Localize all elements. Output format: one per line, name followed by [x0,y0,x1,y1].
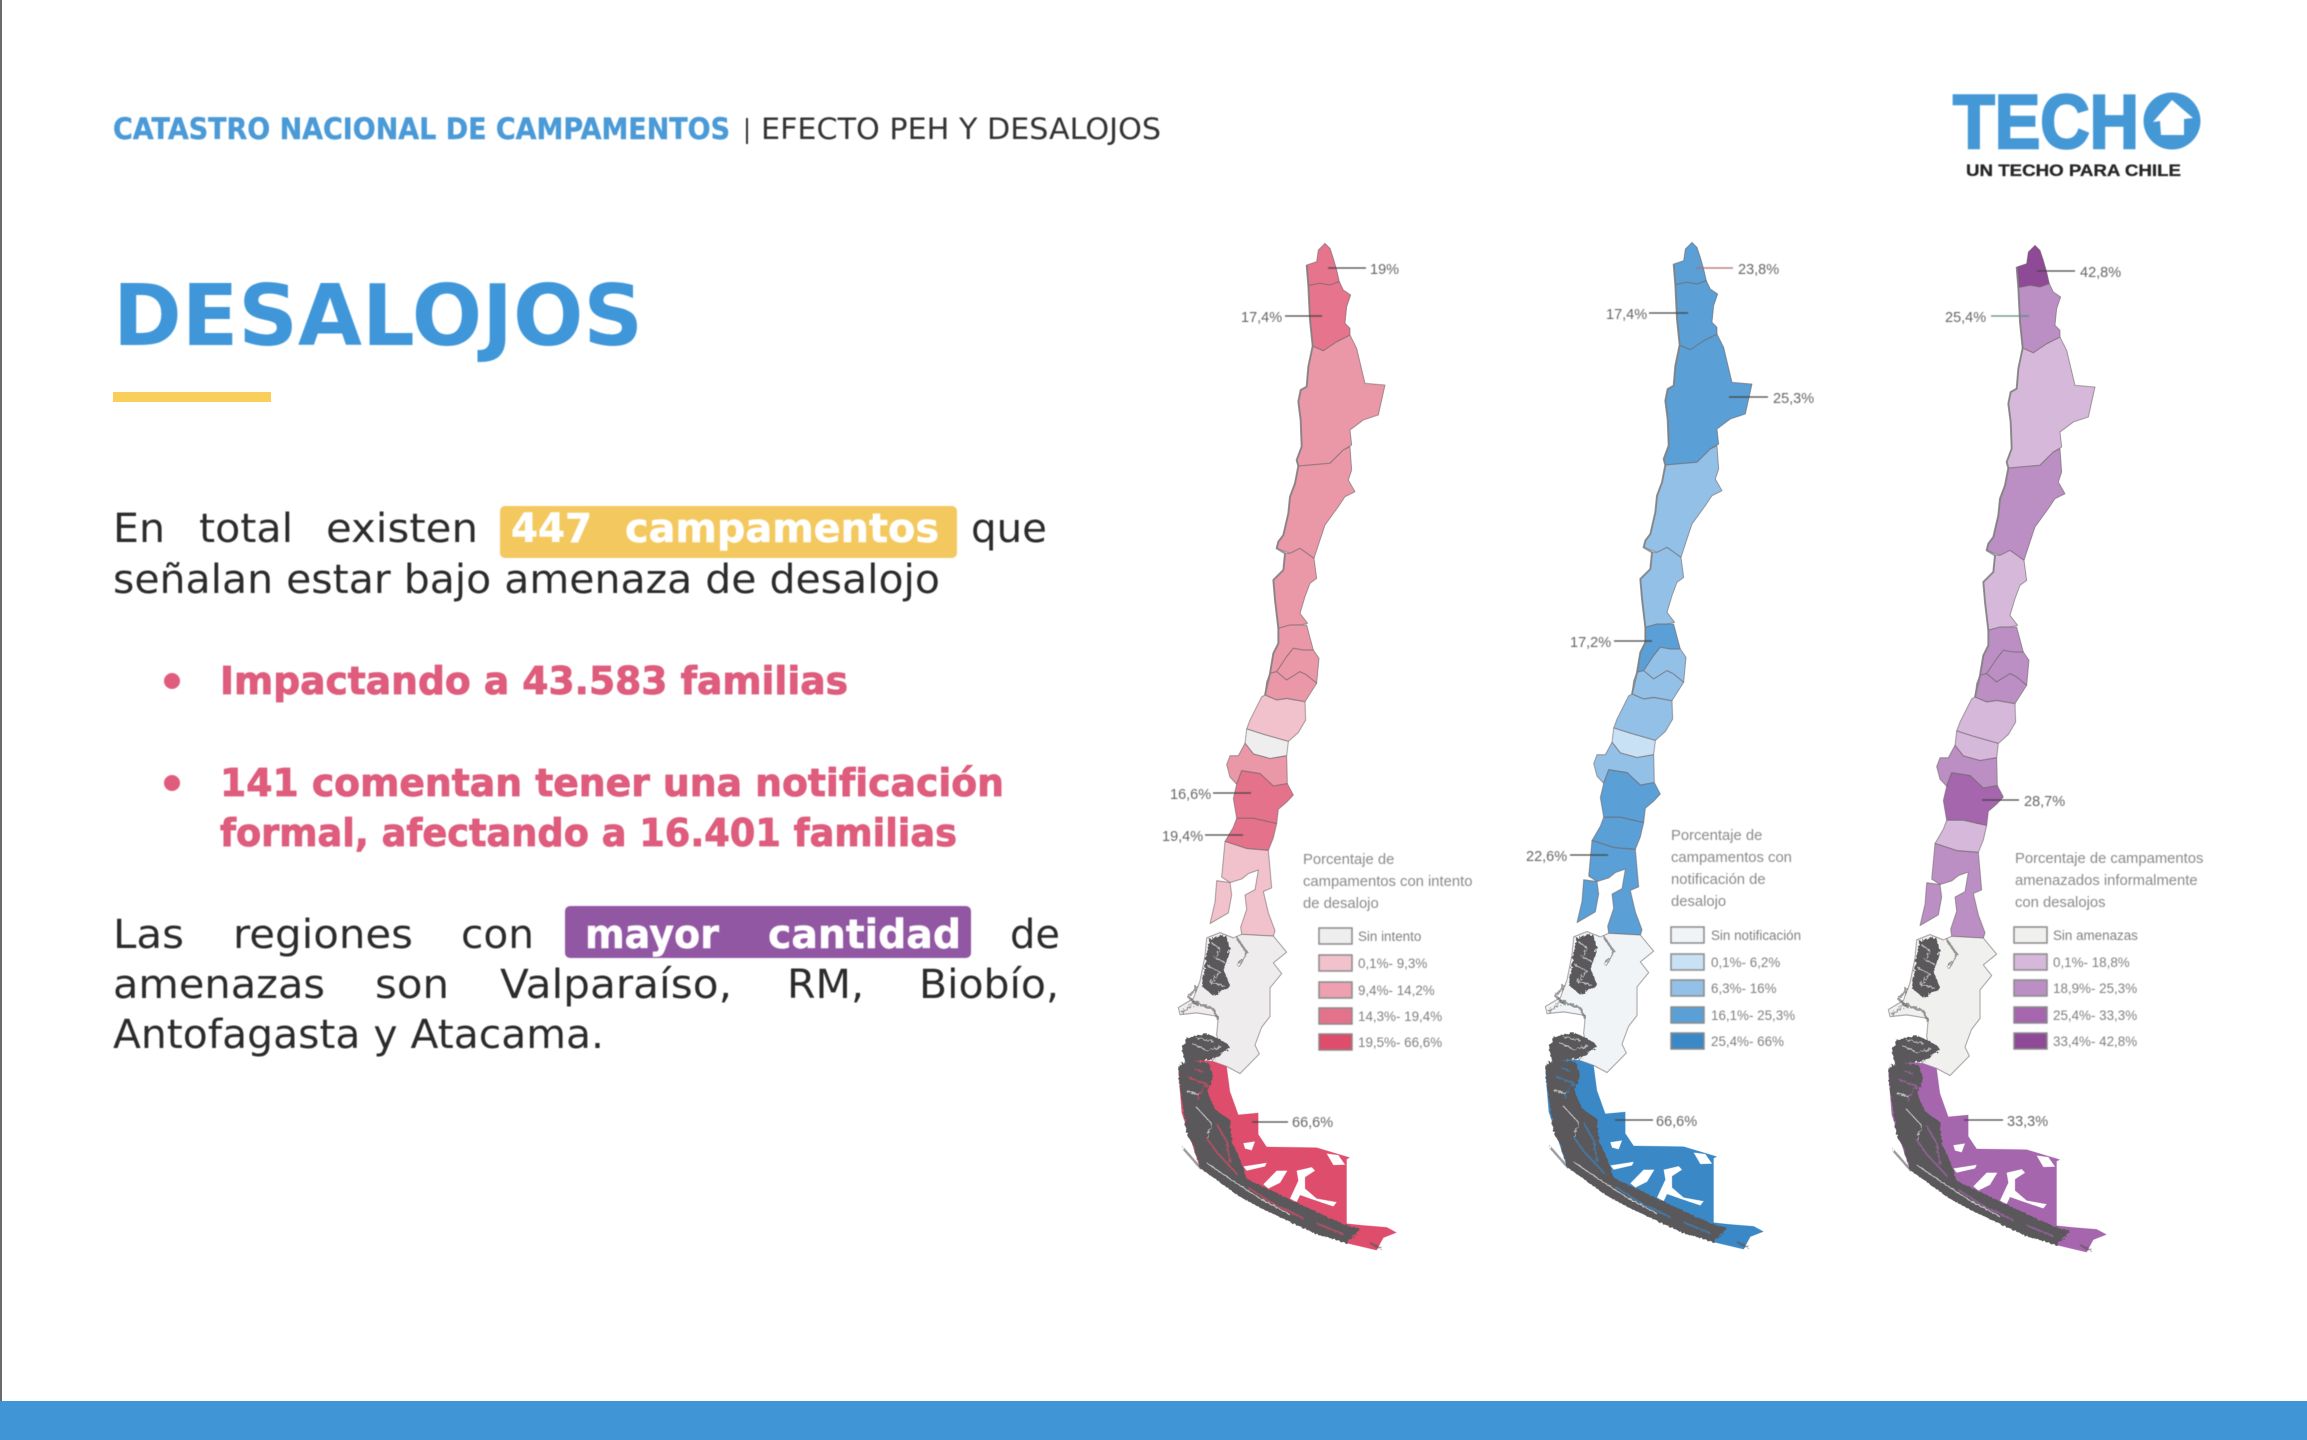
legend: pink map: Sin intento [1358,929,1421,944]
callouts: purple map: 33,3% [2007,1114,2048,1130]
legend: purple map: Porcentaje de campamentos [2015,851,2203,867]
callouts: blue map: 25,3% [1773,391,1814,407]
left edge line [0,0,2,1440]
text block: total campamentos: En [113,506,165,552]
bullet: notificación formal: formal, afectando a 16.401 familias [220,811,957,855]
text block: regiones con mayor cantidad: de [1010,912,1060,958]
map panel: intento de desalojo (pink) [1162,243,1472,1250]
text block: regiones con mayor cantidad: Antofagasta y Atacama. [113,1012,604,1058]
callouts: pink map: 19,4% [1162,829,1203,845]
text block: regiones con mayor cantidad: RM, [787,962,864,1008]
highlight: 447 campamentos [500,506,957,558]
header: section title: EFECTO PEH Y DESALOJOS [761,112,1161,146]
callouts: purple map: 42,8% [2080,265,2121,281]
highlight: 447 campamentos: 447 [511,506,592,552]
text block: regiones con mayor cantidad: amenazas [113,962,325,1008]
callouts: blue map: 23,8% [1738,262,1779,278]
text block: regiones con mayor cantidad: regiones [233,912,413,958]
legend: pink map: de desalojo [1303,896,1379,912]
legend: purple map: amenazados informalmente [2015,873,2198,889]
legend: blue map: campamentos con [1671,850,1792,866]
logo: TECHO: UN TECHO PARA CHILE [1966,161,2181,180]
text block: regiones con mayor cantidad: Biobío, [919,962,1059,1008]
callouts: blue map: 66,6% [1656,1114,1697,1130]
legend: pink map: campamentos con intento [1303,874,1472,890]
callouts: blue map: 17,2% [1570,635,1611,651]
bullet: notificación formal [164,761,1004,855]
legend: pink map [1303,852,1472,1050]
highlight: mayor cantidad [565,906,971,958]
legend: purple map: con desalojos [2015,895,2106,911]
legend: blue map: 0,1%- 6,2% [1711,955,1780,970]
legend: purple map: 0,1%- 18,8% [2053,955,2130,970]
text block: total campamentos: señalan estar bajo amenaza de desalojo [113,557,940,603]
highlight: 447 campamentos: campamentos [625,506,939,552]
legend: purple map: 33,4%- 42,8% [2053,1034,2137,1049]
legend: blue map [1671,828,1801,1049]
map panel: notificación de desalojo (blue) [1526,242,1814,1249]
callouts: purple map: 25,4% [1945,310,1986,326]
callouts: purple map: 28,7% [2024,794,2065,810]
legend: blue map: desalojo [1671,894,1726,910]
legend: blue map: Sin notificación [1711,928,1801,943]
footer band [0,1401,2307,1440]
text block: regiones con mayor cantidad: Las [113,912,184,958]
legend: blue map: 25,4%- 66% [1711,1034,1784,1049]
text block: regiones con mayor cantidad [113,906,1060,1058]
callouts: pink map: 19% [1370,262,1399,278]
legend: pink map: 19,5%- 66,6% [1358,1035,1442,1050]
text block: total campamentos [113,506,1047,603]
bullet: familias impactadas: Impactando a 43.583 familias [220,659,848,703]
bullet: notificación formal: 141 comentan tener una notificación [220,761,1004,805]
callouts: pink map [1162,262,1399,1131]
title accent bar [113,392,271,402]
legend: pink map: 0,1%- 9,3% [1358,956,1427,971]
text block: total campamentos: que [971,506,1047,552]
map panel: amenazas informales (purple) [1888,245,2203,1252]
logo: TECHO: TECH [1953,80,2139,165]
legend: purple map: 18,9%- 25,3% [2053,981,2137,996]
text block: regiones con mayor cantidad: con [461,912,534,958]
callouts: blue map: 17,4% [1606,307,1647,323]
callouts: blue map [1526,262,1814,1130]
text block: total campamentos: existen [326,506,478,552]
text block: total campamentos: total [199,506,293,552]
callouts: pink map: 66,6% [1292,1115,1333,1131]
highlight: mayor cantidad: mayor [585,912,719,958]
legend: pink map: 14,3%- 19,4% [1358,1009,1442,1024]
callouts: pink map: 16,6% [1170,787,1211,803]
legend: purple map: Sin amenazas [2053,928,2138,943]
callouts: blue map: 22,6% [1526,849,1567,865]
highlight: mayor cantidad: cantidad [768,912,961,958]
legend: purple map: 25,4%- 33,3% [2053,1008,2137,1023]
text block: regiones con mayor cantidad: son [375,962,449,1008]
map: Chile pink [1178,243,1397,1250]
legend: blue map: Porcentaje de [1671,828,1762,844]
legend: blue map: 6,3%- 16% [1711,981,1777,996]
legend: pink map: Porcentaje de [1303,852,1394,868]
map: Chile purple [1888,245,2107,1252]
header: section title [113,112,1161,146]
legend: blue map: 16,1%- 25,3% [1711,1008,1795,1023]
legend: purple map [2014,851,2203,1049]
legend: pink map: 9,4%- 14,2% [1358,983,1435,998]
text block: regiones con mayor cantidad: Valparaíso, [500,962,732,1008]
callouts: purple map [1945,265,2121,1130]
map: Chile blue [1545,242,1764,1249]
legend: blue map: notificación de [1671,872,1766,888]
header: section title: CATASTRO NACIONAL DE CAMPAMENTOS [113,112,730,146]
title: DESALOJOS: DESALOJOS [113,267,643,366]
callouts: pink map: 17,4% [1241,310,1282,326]
